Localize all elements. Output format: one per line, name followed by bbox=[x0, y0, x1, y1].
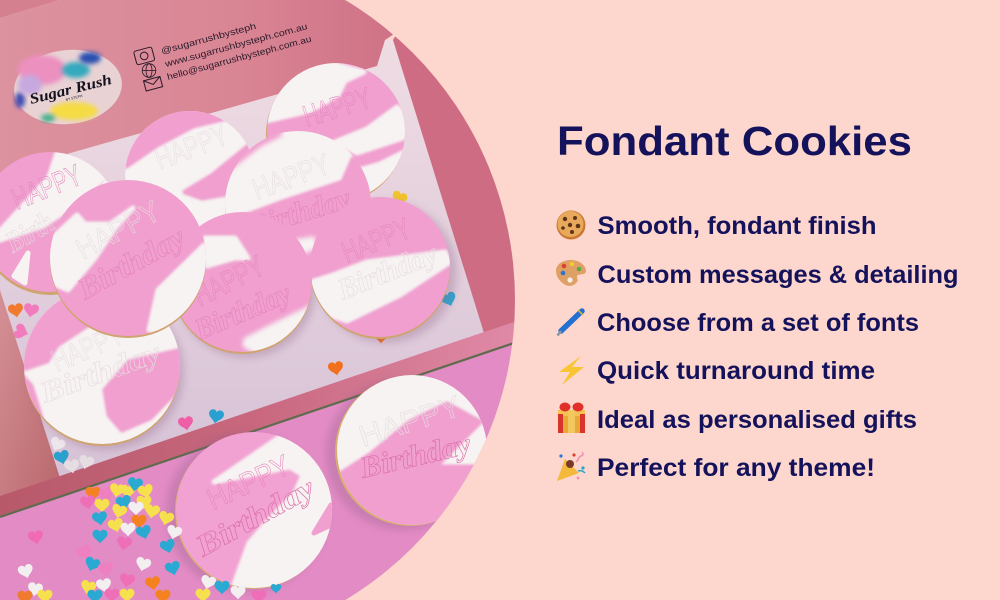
box lid edge bbox=[0, 0, 60, 18]
cookie lettering: HAPPY bbox=[337, 212, 415, 269]
logo sticker bbox=[12, 48, 122, 124]
cookie: lower centre bbox=[180, 212, 312, 354]
box right wall bbox=[393, 36, 515, 332]
cookie lettering: HAPPY bbox=[7, 159, 86, 216]
website: www.sugarrushbysteph.com.au bbox=[163, 21, 309, 69]
cookie lettering: Birthday bbox=[356, 427, 474, 485]
cookie lettering: HAPPY bbox=[47, 319, 129, 378]
cookie lettering: Birth bbox=[0, 205, 60, 259]
cookie: left bbox=[0, 152, 108, 295]
cookie lettering: HAPPY bbox=[188, 250, 270, 313]
feature list bbox=[556, 210, 958, 482]
instagram handle: @sugarrushbysteph bbox=[160, 21, 257, 56]
email: hello@sugarrushbysteph.com.au bbox=[166, 34, 312, 82]
cookie lettering: HAPPY bbox=[355, 390, 465, 454]
cookie: large left bbox=[45, 178, 212, 338]
cookie: bottom right bbox=[335, 372, 490, 530]
logo strapline: BY STEPH bbox=[65, 94, 83, 102]
cookie lettering: Birthday bbox=[244, 182, 355, 244]
icon: envelope bbox=[143, 76, 163, 91]
logo wordmark: Sugar Rush bbox=[28, 72, 113, 108]
list item: quick turnaround: Quick turnaround time bbox=[597, 357, 875, 385]
cookie: bottom centre bbox=[170, 425, 340, 595]
box floor bbox=[0, 40, 486, 478]
cookie: bottom left in box bbox=[24, 300, 180, 446]
box left wall bbox=[0, 290, 60, 498]
box front edge bbox=[0, 343, 514, 517]
list item: choose fonts: Choose from a set of fonts bbox=[597, 309, 919, 337]
icon: gift bbox=[558, 402, 585, 433]
icon: globe bbox=[142, 64, 156, 77]
cookie lettering: Birthday bbox=[332, 237, 443, 307]
icon: party popper bbox=[557, 452, 585, 481]
list item: ideal gifts: Ideal as personalised gifts bbox=[597, 406, 917, 434]
contact details bbox=[133, 21, 312, 91]
cookie lettering: Birthday bbox=[35, 336, 166, 410]
pink surface below the box bbox=[0, 320, 530, 600]
cookie lettering: HAPPY bbox=[299, 82, 375, 134]
cookie lettering: HAPPY bbox=[151, 119, 233, 177]
cookie: right middle bbox=[310, 197, 450, 339]
small hearts on the box floor bbox=[7, 190, 458, 475]
cookie lettering: HAPPY bbox=[202, 449, 296, 516]
icon: instagram bbox=[133, 47, 155, 65]
title: Fondant Cookies bbox=[557, 118, 912, 164]
cookie lettering: Birthday bbox=[189, 276, 296, 347]
cookie: centre top bbox=[225, 131, 371, 266]
photo: boxed fondant cookies in a circular crop bbox=[0, 0, 530, 600]
icon: lightning bolt bbox=[559, 356, 584, 385]
cookie lettering: Birthday bbox=[71, 220, 191, 307]
cookie shadows bbox=[28, 201, 478, 592]
cookie lettering: HAPPY bbox=[71, 195, 166, 266]
cookie lettering: Birthday bbox=[189, 471, 321, 564]
icon: pen bbox=[558, 310, 583, 336]
box back wall bbox=[0, 0, 400, 173]
cookie: back middle bbox=[125, 111, 250, 226]
box front wall bbox=[0, 320, 520, 516]
list item: any theme: Perfect for any theme! bbox=[597, 454, 875, 482]
confetti hearts on pink surface bbox=[17, 477, 281, 600]
icon: cookie bbox=[556, 210, 586, 240]
list item: custom messages: Custom messages & detailing bbox=[598, 261, 958, 289]
list item: smooth finish: Smooth, fondant finish bbox=[598, 212, 876, 240]
icon: artist palette bbox=[556, 260, 586, 286]
cookie: back right bbox=[266, 63, 405, 194]
cookie lettering: HAPPY bbox=[248, 148, 335, 207]
